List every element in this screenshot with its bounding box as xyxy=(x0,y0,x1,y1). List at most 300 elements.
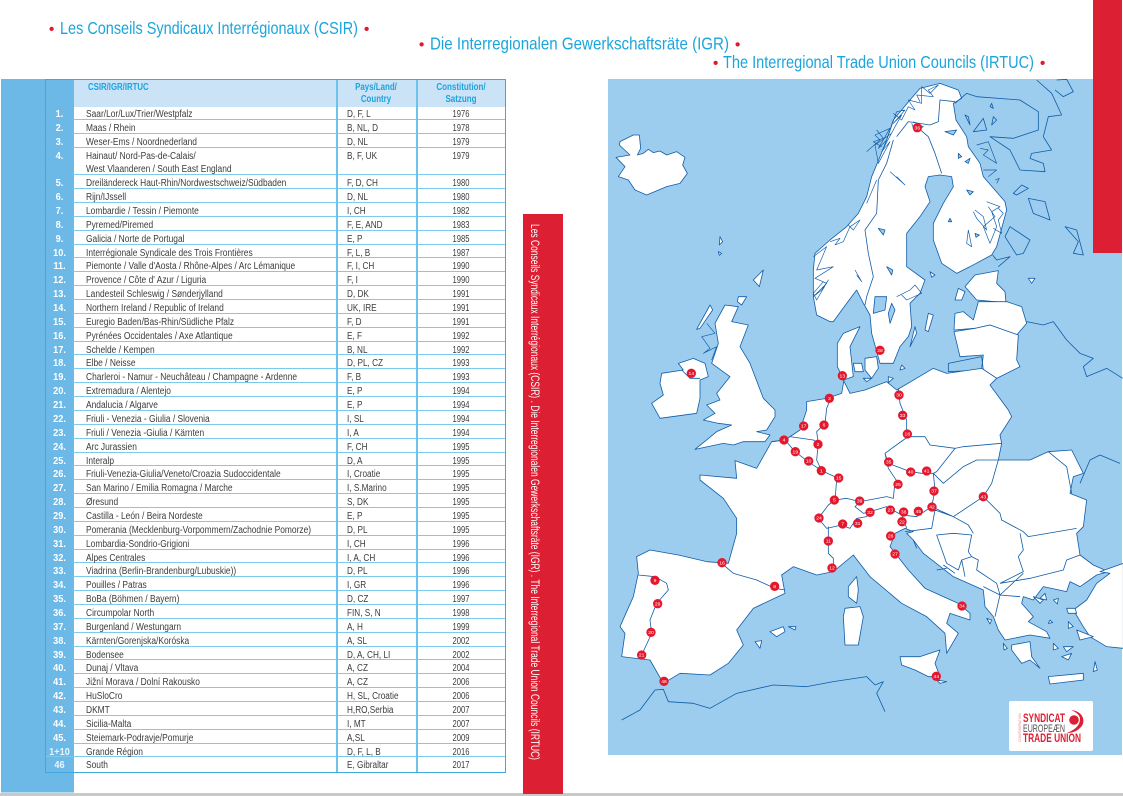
table header xyxy=(45,79,506,106)
table rows: B, NL xyxy=(347,345,368,356)
table rows: 25. xyxy=(53,456,66,466)
table rows: I, SL xyxy=(347,414,364,425)
marker 6: 6 xyxy=(823,423,826,429)
marker 45: 45 xyxy=(916,509,921,515)
marker 17: 17 xyxy=(801,424,807,430)
table rows: Charleroi - Namur - Neuchâteau / Champagne - Ardenne xyxy=(86,372,297,383)
title: French: • xyxy=(364,21,369,38)
table rows: 2017 xyxy=(453,760,469,771)
table rows: D, F, L xyxy=(347,109,371,120)
table rows: I, Croatie xyxy=(347,469,380,480)
table rows: Steiemark-Podravje/Pomurje xyxy=(86,733,193,744)
table rows: 1976 xyxy=(453,109,469,120)
marker 37: 37 xyxy=(931,489,937,495)
table rows: 1980 xyxy=(453,178,469,189)
marker 25: 25 xyxy=(895,482,901,488)
marker 42: 42 xyxy=(929,505,935,511)
Corsica xyxy=(848,577,858,603)
title: German: • xyxy=(735,36,740,54)
table rows: Hainaut/ Nord-Pas-de-Calais/ xyxy=(86,151,196,162)
marker 44: 44 xyxy=(934,674,939,680)
marker 5 xyxy=(830,495,839,505)
marker 28: 28 xyxy=(877,348,883,354)
table rows: 43. xyxy=(53,705,66,716)
marker 12: 12 xyxy=(829,566,835,572)
marker 30: 30 xyxy=(896,393,902,399)
table rows: I, CH xyxy=(347,206,366,217)
marker 10 xyxy=(804,456,813,466)
logo: Syndicat European Trade Union: CONFEDERATION xyxy=(1017,713,1022,742)
table rows: West Vlaanderen / South East England xyxy=(86,164,232,175)
table rows: 1995 xyxy=(453,442,469,453)
marker 4 xyxy=(779,435,789,445)
marker 35 xyxy=(884,457,893,467)
table rows: F, I xyxy=(347,275,358,286)
map panel xyxy=(608,79,1123,755)
table rows: 17. xyxy=(53,345,66,356)
marker 33: 33 xyxy=(900,413,906,419)
marker 23 xyxy=(886,505,895,515)
table rows: 1983 xyxy=(453,220,469,231)
table rows: 1995 xyxy=(453,483,469,494)
title: French: • xyxy=(49,21,54,38)
marker 26: 26 xyxy=(888,534,894,540)
table rows: 37. xyxy=(53,622,66,633)
table rows: 2004 xyxy=(453,663,469,674)
map: northern Europe xyxy=(616,79,1123,418)
table rows: Arc Jurassien xyxy=(86,442,137,453)
table rows: F, CH xyxy=(347,442,368,453)
marker 46: 46 xyxy=(661,679,667,685)
table rows: BoBa (Böhmen / Bayern) xyxy=(86,594,179,605)
marker 39: 39 xyxy=(857,499,863,505)
lakes xyxy=(873,130,979,323)
table rows: 21. xyxy=(53,400,66,411)
marker 33 xyxy=(898,411,907,420)
table rows: I, GR xyxy=(347,580,366,591)
table rows: 1995 xyxy=(453,469,469,480)
marker 3: 3 xyxy=(828,396,831,402)
table rows: 28. xyxy=(53,497,66,508)
table rows: 34. xyxy=(53,580,66,591)
table rows: 26. xyxy=(53,469,66,480)
marker 39 xyxy=(855,496,864,506)
table rows: Friuli / Venezia -Giulia / Kärnten xyxy=(86,428,204,439)
marker 7 xyxy=(838,519,847,529)
table rows: 1994 xyxy=(453,428,469,439)
logo: Syndicat European Trade Union: SYNDICAT xyxy=(1023,713,1065,725)
table rows: Extremadura / Alentejo xyxy=(86,386,171,397)
title lines xyxy=(49,18,1045,72)
marker 18: 18 xyxy=(905,432,910,438)
table rows: UK, IRE xyxy=(347,303,377,314)
bottom grey edge xyxy=(0,793,1123,796)
table rows: Kärnten/Gorenjska/Koróska xyxy=(86,636,189,647)
table rows: 2007 xyxy=(453,719,469,730)
Balearic islands xyxy=(755,627,796,648)
table rows: 1982 xyxy=(453,206,469,217)
left blue band xyxy=(1,79,74,792)
table rows: 1990 xyxy=(453,275,469,286)
table rows: 1999 xyxy=(453,622,469,633)
table rows: 2002 xyxy=(453,636,469,647)
marker 16: 16 xyxy=(719,560,725,566)
table rows: Castilla - León / Beira Nordeste xyxy=(86,511,203,522)
marker 27: 27 xyxy=(892,552,898,558)
table rows: 30. xyxy=(53,525,66,536)
table header: CSIR/IGR/IRTUC xyxy=(88,82,149,92)
table rows: 1980 xyxy=(453,192,469,203)
table header: Satzung xyxy=(445,94,477,105)
table rows: 1979 xyxy=(453,137,469,148)
marker 41 xyxy=(922,466,931,476)
table rows: A, CZ xyxy=(347,663,368,674)
marker 23: 23 xyxy=(888,508,893,514)
table rows: 14. xyxy=(53,303,66,314)
table rows: Northern Ireland / Republic of Ireland xyxy=(86,303,224,314)
table header: Pays/Land/ xyxy=(355,82,397,93)
red corner block xyxy=(1093,0,1122,253)
table rows: HuSloCro xyxy=(86,691,122,702)
table rows: Friuli - Venezia - Giulia / Slovenia xyxy=(86,414,210,425)
title: French: Les Conseils Syndicaux Interrégionaux (CSIR) xyxy=(60,18,358,38)
marker 10: 10 xyxy=(806,459,812,465)
table rows: 13. xyxy=(53,289,66,300)
table rows: Provence / Côte d' Azur / Liguria xyxy=(86,275,206,286)
table rows: D, F, L, B xyxy=(347,747,381,758)
marker 8: 8 xyxy=(773,584,776,590)
marker 38: 38 xyxy=(901,510,907,516)
table header: Constitution/ xyxy=(436,82,486,93)
table rows: 40. xyxy=(53,663,66,674)
table rows: Landesteil Schleswig / Sønderjylland xyxy=(86,289,223,300)
marker 9: 9 xyxy=(654,578,657,584)
table rows: 11. xyxy=(53,261,66,272)
table rows: Lombardie / Tessin / Piemonte xyxy=(86,206,199,217)
table rows: I, MT xyxy=(347,719,366,730)
marker 4: 4 xyxy=(783,438,786,444)
table rows: D, PL, CZ xyxy=(347,358,383,369)
marker 21 xyxy=(637,650,646,660)
table rows: E, P xyxy=(347,400,363,411)
marker 12 xyxy=(827,563,837,573)
marker 11 xyxy=(824,536,833,546)
marker 22 xyxy=(897,517,907,526)
marker 13: 13 xyxy=(840,373,845,379)
marker 13 xyxy=(838,371,847,380)
table rows: Weser-Ems / Noordnederland xyxy=(86,137,197,148)
table rows: 2006 xyxy=(453,677,469,688)
marker 24 xyxy=(814,513,824,523)
table rows: 42. xyxy=(53,691,66,702)
Swedish islands xyxy=(900,272,1035,370)
table rows: 29. xyxy=(53,511,66,522)
Dalmatian coast islands xyxy=(913,540,955,573)
table rows: 1990 xyxy=(453,261,469,272)
table rows: 3. xyxy=(56,137,63,148)
table rows: H,RO,Serbia xyxy=(347,705,393,716)
table rows: Grande Région xyxy=(86,747,143,758)
table rows: 4. xyxy=(56,151,63,162)
table rows: A, SL xyxy=(347,636,367,647)
marker 46 xyxy=(659,677,669,686)
table rows: 2002 xyxy=(453,650,469,661)
table rows: I, CH xyxy=(347,539,366,550)
table rows: Pyrénées Occidentales / Axe Atlantique xyxy=(86,331,233,342)
marker 31 xyxy=(853,519,862,528)
marker 43 xyxy=(979,492,988,501)
table rows: Galicia / Norte de Portugal xyxy=(86,234,185,245)
table rows: 2006 xyxy=(453,691,469,702)
marker 29: 29 xyxy=(655,601,661,607)
table rows: 20. xyxy=(53,386,66,397)
table rows: 1+10 xyxy=(49,747,70,758)
table rows: E, Gibraltar xyxy=(347,760,388,771)
table rows: 1996 xyxy=(453,553,469,564)
Norwegian coast islands xyxy=(813,85,938,300)
marker 2: 2 xyxy=(817,442,820,448)
marker 2 xyxy=(813,440,823,449)
table rows: FIN, S, N xyxy=(347,608,381,619)
table rows: E, P xyxy=(347,386,363,397)
table rows: B, NL, D xyxy=(347,123,378,134)
title: English: • xyxy=(713,55,718,72)
vertical red panel xyxy=(523,214,563,794)
Bosnia xyxy=(937,533,972,570)
table rows: Alpes Centrales xyxy=(86,553,145,564)
table rows: B, F, UK xyxy=(347,151,377,162)
table rows: F, I, CH xyxy=(347,261,374,272)
table rows: Pouilles / Patras xyxy=(86,580,147,591)
table rows: 1998 xyxy=(453,608,469,619)
table rows: D, A xyxy=(347,456,363,466)
table rows: 1992 xyxy=(453,345,469,356)
marker 30 xyxy=(894,390,904,400)
table rows: 1987 xyxy=(453,248,469,259)
table rows: 31. xyxy=(53,539,66,550)
table rows: A,SL xyxy=(347,733,365,744)
marker 45 xyxy=(914,507,923,516)
marker 20: 20 xyxy=(648,630,654,636)
table rows: 2. xyxy=(56,123,63,134)
marker 44 xyxy=(932,672,941,681)
marker 11: 11 xyxy=(826,539,831,545)
table rows: Pyremed/Piremed xyxy=(86,220,153,231)
table rows: 18. xyxy=(53,358,66,369)
table rows: E, P xyxy=(347,511,363,522)
table rows: F, D, CH xyxy=(347,178,378,189)
Baltic states xyxy=(965,271,1006,303)
marker 35: 35 xyxy=(886,460,892,466)
marker 24: 24 xyxy=(816,516,822,522)
table rows: H, SL, Croatie xyxy=(347,691,399,702)
marker 17 xyxy=(799,421,808,431)
table rows: D, NL xyxy=(347,192,368,203)
marker 37 xyxy=(929,486,939,496)
marker 16 xyxy=(717,558,727,567)
table rows: I, S.Marino xyxy=(347,483,387,494)
table rows: 39. xyxy=(53,650,66,661)
table rows: San Marino / Emilia Romagna / Marche xyxy=(86,483,233,494)
table rows: 8. xyxy=(56,220,63,231)
title: English: • xyxy=(1040,55,1045,72)
Danish islands xyxy=(853,357,893,383)
Peloponnese xyxy=(1012,642,1040,668)
table rows: I, A xyxy=(347,428,359,439)
table rows: 1. xyxy=(56,109,63,120)
title: German: • xyxy=(419,36,424,54)
table rows: Andalucia / Algarve xyxy=(86,400,158,411)
table rows: Circumpolar North xyxy=(86,608,154,619)
table rows: Jižní Morava / Dolní Rakousko xyxy=(86,677,200,688)
table rows: 1993 xyxy=(453,358,469,369)
marker 14: 14 xyxy=(689,371,694,377)
table rows: Burgenland / Westungarn xyxy=(86,622,181,633)
marker 14 xyxy=(687,369,696,378)
table rows: 32. xyxy=(53,553,66,564)
logo: Syndicat European Trade Union: TRADE UNION xyxy=(1023,733,1081,745)
table rows: F, E, AND xyxy=(347,220,383,231)
table rows: 15. xyxy=(53,317,66,328)
table rows: E, P xyxy=(347,234,363,245)
table rows: 10. xyxy=(53,248,66,259)
table rows: 7. xyxy=(56,206,63,217)
table rows: D, DK xyxy=(347,289,369,300)
table rows: 1978 xyxy=(453,123,469,134)
Greek islands xyxy=(937,593,1097,683)
marker 18 xyxy=(903,429,912,439)
table rows: DKMT xyxy=(86,705,110,716)
marker 40: 40 xyxy=(908,470,914,476)
marker 19: 19 xyxy=(793,449,798,455)
table rows: 1995 xyxy=(453,525,469,536)
marker 29 xyxy=(653,599,662,608)
marker 32 xyxy=(865,508,875,517)
marker 31: 31 xyxy=(855,521,861,527)
title: English: The Interregional Trade Union Councils (IRTUC) xyxy=(723,52,1034,72)
table rows: D, PL xyxy=(347,525,368,536)
table rows: Saar/Lor/Lux/Trier/Westpfalz xyxy=(86,109,192,120)
table rows: Elbe / Neisse xyxy=(86,358,135,369)
Ukraine coast xyxy=(1048,452,1120,493)
table rows: 9. xyxy=(56,234,63,245)
national borders xyxy=(638,388,1080,658)
table rows: 44. xyxy=(53,719,66,730)
table rows: D, CZ xyxy=(347,594,368,605)
table rows: 1995 xyxy=(453,456,469,466)
table rows: I, A, CH xyxy=(347,553,375,564)
table rows: 1996 xyxy=(453,566,469,577)
table rows: 1991 xyxy=(453,303,469,314)
marker 28 xyxy=(875,346,885,355)
table rows: 1985 xyxy=(453,234,469,245)
table rows: 45. xyxy=(53,733,66,744)
table rows: A, H xyxy=(347,622,363,633)
table rows: 16. xyxy=(53,331,66,342)
marker 38 xyxy=(899,507,908,517)
marker 36: 36 xyxy=(915,125,920,131)
marker 25 xyxy=(893,480,903,489)
Crete xyxy=(1048,673,1083,684)
table rows: D, NL xyxy=(347,137,368,148)
table rows: Sicilia-Malta xyxy=(86,719,131,730)
marker 43: 43 xyxy=(981,494,986,500)
table rows: 41. xyxy=(53,677,66,688)
map: continental Europe xyxy=(620,305,1123,720)
table rows: 24. xyxy=(53,442,66,453)
table rows: E, F xyxy=(347,331,362,342)
table rows: 1997 xyxy=(453,594,469,605)
table rows: 22. xyxy=(53,414,66,425)
table rows: Euregio Baden/Bas-Rhin/Südliche Pfalz xyxy=(86,317,234,328)
table rows: Dreiländereck Haut-Rhin/Nordwestschweiz/Südbaden xyxy=(86,178,286,189)
Sardinia xyxy=(843,607,863,645)
logo: Syndicat European Trade Union xyxy=(1009,701,1093,751)
mainland xyxy=(620,327,1108,683)
table rows: F, B xyxy=(347,372,361,383)
table rows: Friuli-Venezia-Giulia/Veneto/Croazia Sudoccidentale xyxy=(86,469,281,480)
marker 36 xyxy=(913,123,922,132)
table rows: 1979 xyxy=(453,151,469,162)
table header: Country xyxy=(361,94,391,105)
table rows: 35. xyxy=(53,594,66,605)
map markers xyxy=(637,123,988,686)
table rows: Interrégionale Syndicale des Trois Frontières xyxy=(86,248,253,259)
table of councils xyxy=(46,80,505,772)
table rows: Piemonte / Valle d'Aosta / Rhône-Alpes / Arc Lémanique xyxy=(86,261,295,272)
marker 41: 41 xyxy=(924,469,930,475)
marker 8 xyxy=(770,582,779,591)
table rows: Interalp xyxy=(86,456,114,466)
marker 1: 1 xyxy=(820,468,823,474)
Great Britain xyxy=(695,305,775,449)
title: German: Die Interregionalen Gewerkschaftsräte (IGR) xyxy=(430,34,729,54)
Ireland xyxy=(652,358,708,418)
marker 19 xyxy=(791,447,800,456)
table outline xyxy=(45,79,506,772)
marker 27 xyxy=(890,549,900,559)
marker 40 xyxy=(906,467,915,477)
table rows: South xyxy=(86,760,108,771)
Sicily xyxy=(900,650,940,677)
marker 7: 7 xyxy=(841,522,844,528)
table rows: D, PL xyxy=(347,566,368,577)
marker 42 xyxy=(927,502,937,512)
table rows: Øresund xyxy=(86,497,118,508)
table rows: 36. xyxy=(53,608,66,619)
table rows: A, CZ xyxy=(347,677,368,688)
marker 34: 34 xyxy=(959,604,965,610)
table rows: Rijn/IJssell xyxy=(86,192,126,203)
logo: Syndicat European Trade Union: EUROPEÆN xyxy=(1023,723,1065,735)
table rows: Lombardia-Sondrio-Grigioni xyxy=(86,539,189,550)
table rows: F, D xyxy=(347,317,362,328)
table rows: Pomerania (Mecklenburg-Vorpommern/Zachodnie Pomorze) xyxy=(86,525,311,536)
table rows: F, L, B xyxy=(347,248,370,259)
table rows: 1991 xyxy=(453,317,469,328)
table rows: Bodensee xyxy=(86,650,124,661)
marker 20 xyxy=(646,628,656,637)
table rows: D, A, CH, LI xyxy=(347,650,390,661)
table rows: S, DK xyxy=(347,497,368,508)
table rows: 19. xyxy=(53,372,66,383)
table rows: Maas / Rhein xyxy=(86,123,135,134)
marker 34 xyxy=(957,601,967,611)
table rows: 12. xyxy=(53,275,66,286)
table rows: 1994 xyxy=(453,386,469,397)
table rows: 1995 xyxy=(453,497,469,508)
Faroe and Shetland xyxy=(718,237,763,287)
